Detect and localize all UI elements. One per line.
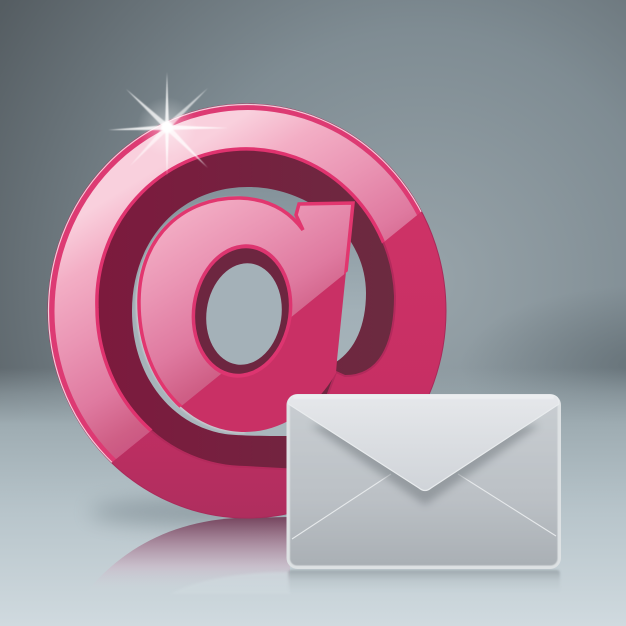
- front letter a white edge: [137, 198, 245, 432]
- envelope reflection: [288, 570, 560, 594]
- outer ring body: [48, 104, 446, 518]
- letter counter dark inside: [187, 242, 297, 380]
- floor shadow under at sign: [90, 498, 330, 526]
- top flap edge: [293, 395, 554, 399]
- ring glossy highlight: [48, 104, 422, 463]
- at sign: [48, 104, 446, 518]
- front letter a gloss: [139, 198, 353, 432]
- envelope: [286, 394, 561, 569]
- inner band bright edge: [95, 147, 385, 432]
- flap shadow: [310, 425, 540, 505]
- reflection inner lighter part: [170, 572, 290, 594]
- right horizon shade: [460, 285, 626, 445]
- ring inner dark band: [97, 149, 395, 470]
- floor: [0, 368, 626, 626]
- reflection of at sign: [85, 517, 290, 594]
- envelope fold lines: [292, 474, 556, 539]
- front letter a body: [139, 198, 353, 432]
- envelope flap: [288, 395, 559, 490]
- see-through gap: [132, 187, 366, 436]
- letter counter hole: [200, 258, 288, 370]
- letter counter border: [183, 238, 301, 384]
- envelope body: [286, 394, 561, 569]
- sparkle: [108, 72, 228, 176]
